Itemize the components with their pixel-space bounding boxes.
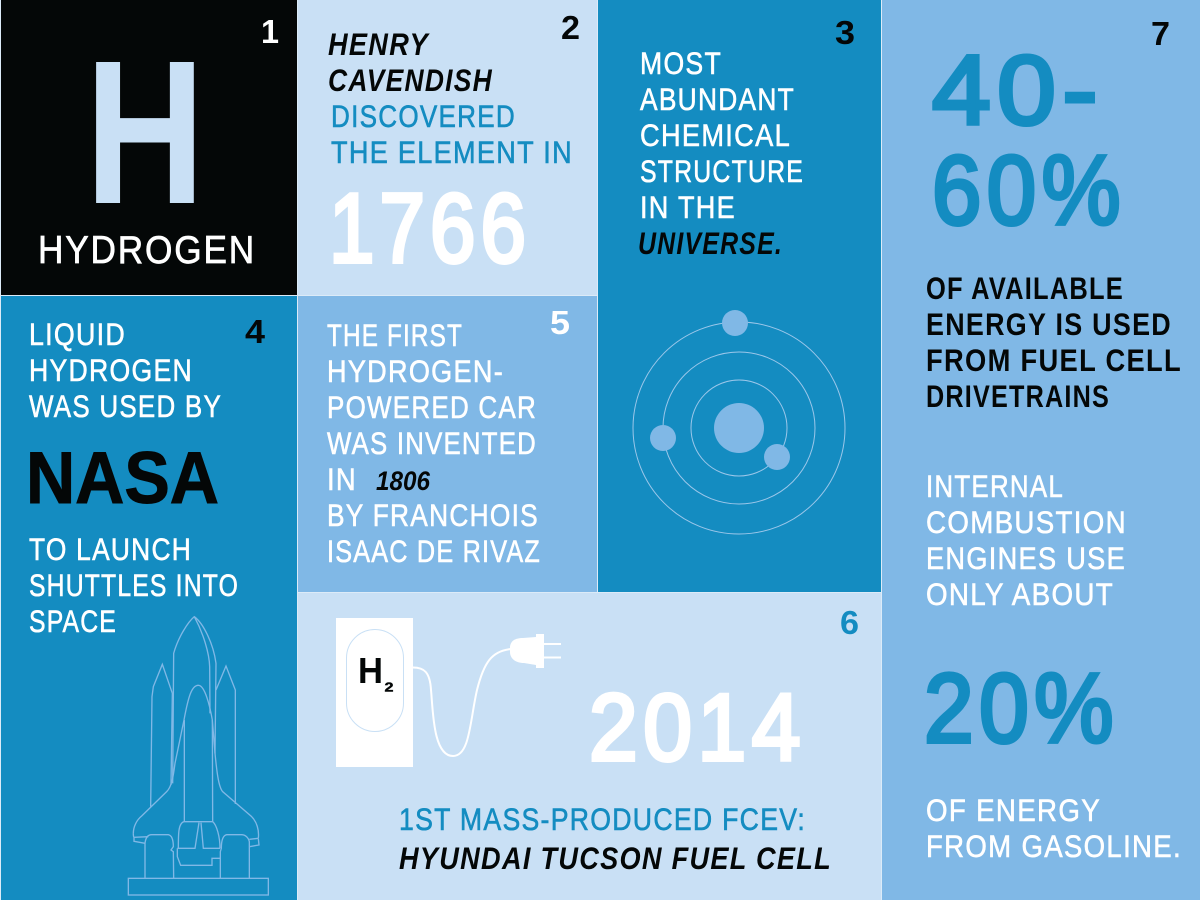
fuel cell text [926, 270, 1182, 414]
panel 7: efficiency [882, 0, 1200, 900]
discoverer name [328, 26, 493, 98]
statistic 40-60%: 60% [932, 135, 1126, 245]
combustion text: ONLY ABOUT [926, 576, 1114, 612]
discoverer name: HENRY [328, 26, 430, 62]
combustion text: ENGINES USE [926, 540, 1126, 576]
panel 3: abundance [598, 0, 881, 592]
car text: BY FRANCHOIS [327, 497, 539, 533]
year 2014: 2014 [589, 675, 806, 781]
abundance text: MOST [640, 45, 722, 81]
FCEV caption [399, 801, 832, 876]
text above logo: HYDROGEN [29, 352, 193, 388]
text below logo: TO LAUNCH [29, 531, 192, 567]
statistic 40-60% [932, 35, 1126, 245]
gasoline text [926, 792, 1182, 864]
FCEV caption: HYUNDAI TUCSON FUEL CELL [399, 840, 832, 876]
car text: POWERED CAR [327, 389, 537, 425]
text below logo: SHUTTLES INTO [29, 567, 239, 603]
text above logo [29, 316, 222, 424]
number 5: 5 [550, 304, 570, 341]
year 1766: 1766 [329, 173, 531, 283]
icon: hydrogen fuel station with plug: 2 [384, 680, 394, 694]
number 3: 3 [835, 14, 855, 51]
abundance text: UNIVERSE. [638, 225, 783, 261]
car text: WAS INVENTED [327, 425, 537, 461]
icon: hydrogen fuel station with plug [336, 618, 561, 767]
combustion text: INTERNAL [926, 468, 1064, 504]
discovery text: THE ELEMENT IN [331, 134, 573, 170]
statistic 20%: 20% [924, 653, 1119, 763]
abundance text [638, 45, 804, 261]
car text [327, 317, 541, 569]
panel 1: element tile [1, 0, 297, 295]
fuel cell text: OF AVAILABLE [926, 270, 1124, 306]
text below logo [29, 531, 239, 639]
panel 5: first hydrogen car [298, 296, 597, 592]
panel 6: mass-produced FCEV [298, 593, 881, 900]
fuel cell text: DRIVETRAINS [926, 378, 1110, 414]
text above logo: LIQUID [29, 316, 126, 352]
car text: HYDROGEN- [327, 353, 504, 389]
icon: space shuttle [128, 617, 268, 895]
car text: IN [327, 461, 357, 497]
panel 4: NASA [1, 296, 297, 900]
text above logo: WAS USED BY [29, 388, 222, 424]
element symbol H: H [85, 18, 205, 247]
discoverer name: CAVENDISH [328, 62, 493, 98]
combustion text [926, 468, 1127, 612]
combustion text: COMBUSTION [926, 504, 1127, 540]
text below logo: SPACE [29, 603, 117, 639]
number 2: 2 [561, 9, 580, 46]
car text: 1806 [376, 466, 431, 496]
number 1: 1 [261, 13, 279, 50]
icon: hydrogen fuel station with plug: H [358, 650, 383, 691]
abundance text: STRUCTURE [640, 153, 804, 189]
panel 2: discovery [298, 0, 597, 295]
abundance text: CHEMICAL [640, 117, 791, 153]
abundance text: IN THE [640, 189, 736, 225]
element name: HYDROGEN [38, 229, 256, 272]
icon: atom [633, 310, 845, 534]
number 6: 6 [840, 604, 859, 641]
discovery text: DISCOVERED [331, 98, 516, 134]
abundance text: ABUNDANT [640, 81, 795, 117]
gasoline text: OF ENERGY [926, 792, 1101, 828]
car text: ISAAC DE RIVAZ [327, 533, 541, 569]
statistic 40-60%: 40- [932, 35, 1104, 145]
number 7: 7 [1151, 15, 1170, 52]
NASA wordmark: NASA [26, 438, 219, 519]
discovery text [331, 98, 573, 170]
FCEV caption: 1ST MASS-PRODUCED FCEV: [399, 801, 806, 837]
car text: THE FIRST [327, 317, 463, 353]
number 4: 4 [245, 313, 266, 350]
